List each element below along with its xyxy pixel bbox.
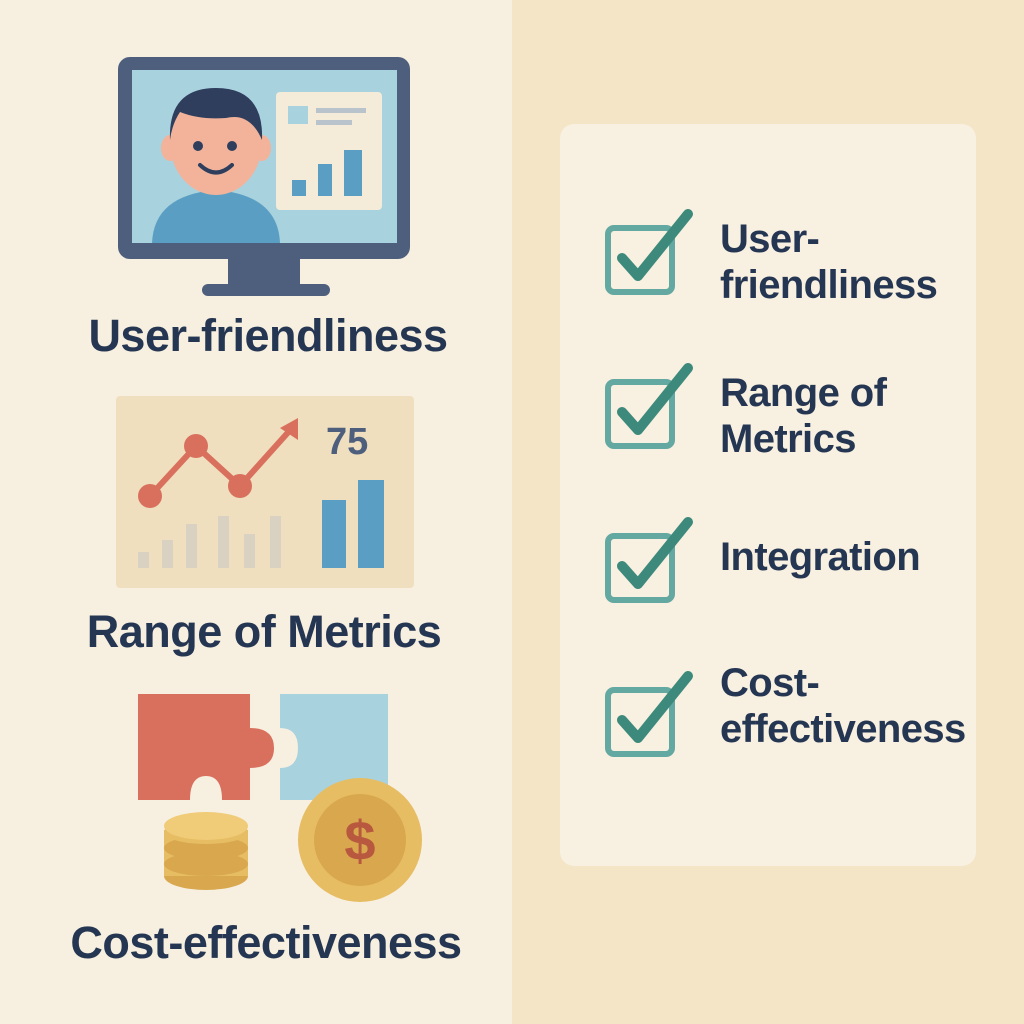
text: Range of Metrics: Range of <box>720 371 886 415</box>
heading: Range of Metrics: Range of Metrics <box>87 606 441 657</box>
icon: metrics chart: 75 <box>326 421 368 463</box>
check 2 <box>605 363 693 449</box>
heading: User-friendliness: User-friendliness <box>88 310 448 361</box>
text: User-friendliness: User- <box>720 217 819 261</box>
icon: metrics chart <box>116 396 414 588</box>
text: Range of Metrics <box>720 371 888 461</box>
icon: puzzle and coins: $ <box>344 809 376 872</box>
text: Cost-effectiveness: effectiveness <box>720 707 966 751</box>
text: Integration: Integration <box>720 535 920 579</box>
panel: checklist <box>560 124 976 866</box>
check 3 <box>605 517 693 603</box>
text: Cost-effectiveness: Cost- <box>720 661 819 705</box>
text: User-friendliness: friendliness <box>720 263 937 307</box>
text: User-friendliness <box>720 217 937 307</box>
text: Range of Metrics: Metrics <box>720 417 856 461</box>
check 4 <box>605 671 693 757</box>
icon: puzzle and coins <box>138 694 422 902</box>
heading: Cost-effectiveness: Cost-effectiveness <box>70 917 462 968</box>
text: Cost-effectiveness <box>720 661 966 751</box>
icon: monitor with user <box>118 57 410 296</box>
check 1 <box>605 209 693 295</box>
